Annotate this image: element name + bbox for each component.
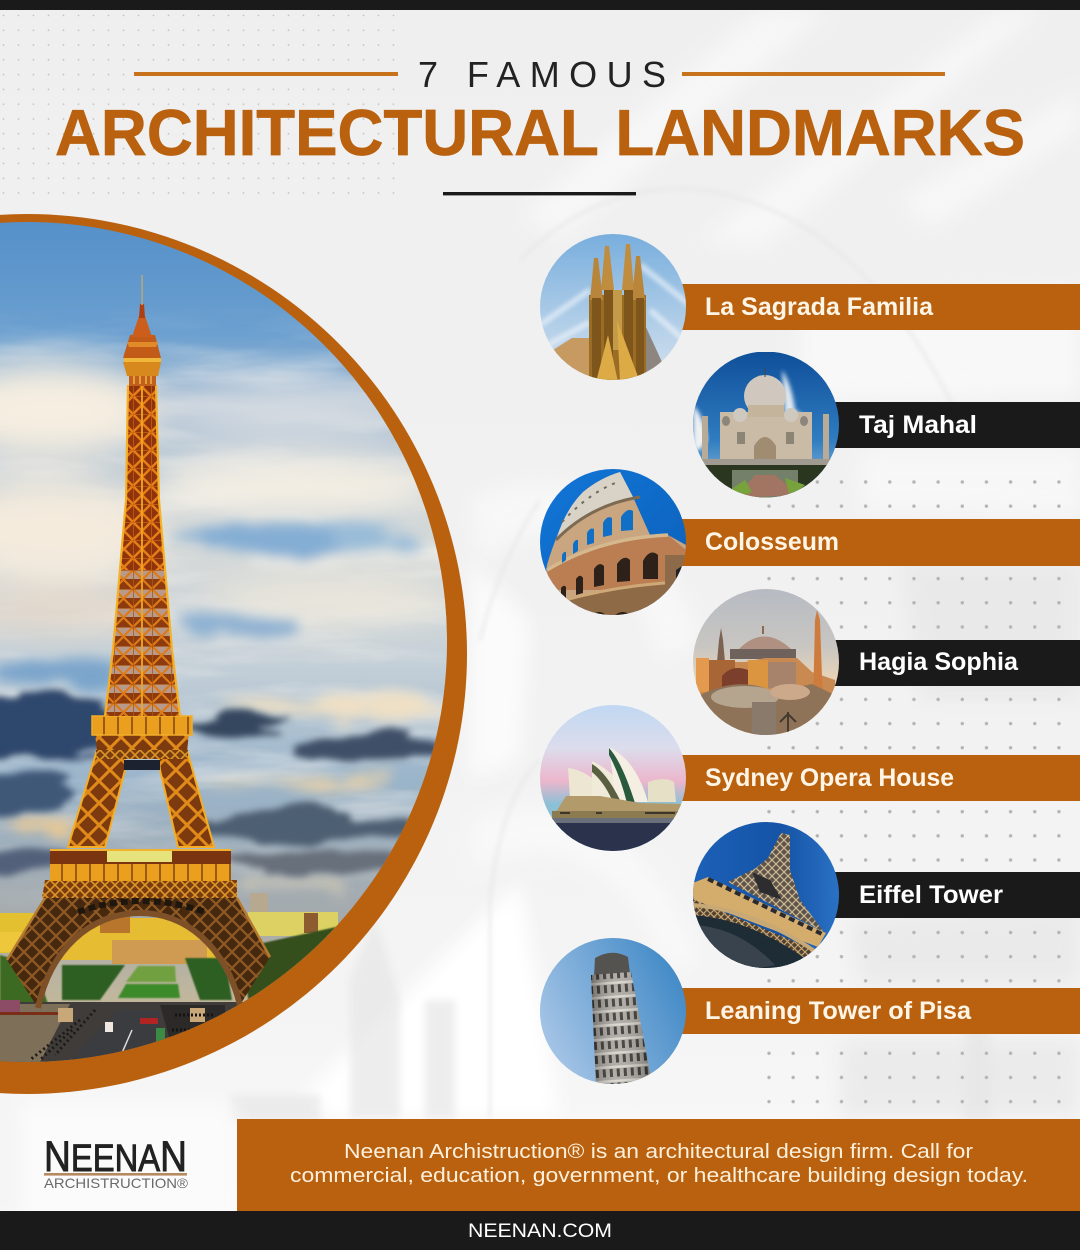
cloud masses bbox=[0, 362, 460, 628]
footer logo: Neenan Archistruction: NEENAN bbox=[44, 1133, 187, 1181]
label text: Hagia Sophia bbox=[859, 648, 1019, 676]
label text: Colosseum bbox=[705, 528, 839, 556]
label bar bbox=[833, 640, 1080, 686]
label text: Taj Mahal bbox=[859, 411, 977, 439]
decorative rule left bbox=[134, 72, 398, 76]
top bar bbox=[0, 0, 1080, 10]
heading: ARCHITECTURAL LANDMARKS bbox=[55, 96, 1025, 169]
photo: Leaning Tower of Pisa bbox=[540, 938, 686, 1086]
photo: Taj Mahal bbox=[693, 352, 839, 500]
hero photo: Eiffel Tower in orange ring bbox=[0, 214, 467, 1094]
photo: Eiffel Tower bbox=[690, 822, 839, 975]
photo: Sydney Opera House bbox=[540, 705, 686, 852]
sky bbox=[0, 220, 460, 1070]
item: Eiffel Tower bbox=[690, 822, 1080, 975]
tower upper shaft bbox=[105, 275, 180, 716]
dot grid bbox=[757, 470, 1072, 1115]
label bar bbox=[680, 519, 1080, 566]
call-to-action line 2: commercial, education, government, or healthcare building design today. bbox=[290, 1165, 1028, 1187]
label text: Leaning Tower of Pisa bbox=[705, 997, 972, 1025]
label text: Sydney Opera House bbox=[705, 764, 954, 792]
bottom bar with website bbox=[0, 1211, 1080, 1250]
bottom bar with website: NEENAN.COM bbox=[468, 1221, 612, 1242]
item: Sydney Opera House bbox=[540, 705, 1080, 852]
call-to-action line 1: Neenan Archistruction® is an architectural design firm. Call for bbox=[344, 1141, 973, 1163]
item: Colosseum bbox=[540, 469, 1080, 620]
title block bbox=[55, 54, 1025, 195]
label bar bbox=[680, 988, 1080, 1034]
label bar bbox=[680, 755, 1080, 801]
photo: Hagia Sophia bbox=[693, 589, 839, 740]
label bar bbox=[680, 284, 1080, 330]
photo bbox=[0, 220, 460, 1072]
label bar bbox=[833, 402, 1080, 448]
photo: La Sagrada Familia bbox=[540, 234, 690, 385]
underline bbox=[443, 192, 636, 195]
decorative rule right bbox=[682, 72, 945, 76]
footer call-to-action panel bbox=[237, 1119, 1080, 1211]
footer logo: Neenan Archistruction: ARCHISTRUCTION® bbox=[44, 1175, 189, 1191]
tower lower section and arch bbox=[7, 849, 270, 1008]
horizon city bbox=[0, 893, 338, 964]
photo: Colosseum bbox=[540, 469, 690, 620]
ground and trees bbox=[0, 926, 336, 1062]
tower middle legs bbox=[68, 716, 214, 847]
item: La Sagrada Familia bbox=[540, 234, 1080, 385]
item: Hagia Sophia bbox=[693, 589, 1080, 740]
label text: La Sagrada Familia bbox=[705, 293, 934, 321]
item: Taj Mahal bbox=[693, 352, 1080, 500]
label text: Eiffel Tower bbox=[859, 881, 1003, 909]
item: Leaning Tower of Pisa bbox=[540, 938, 1080, 1086]
subtitle: 7 FAMOUS bbox=[418, 54, 666, 95]
orange ring bbox=[0, 214, 467, 1094]
label bar bbox=[833, 872, 1080, 918]
